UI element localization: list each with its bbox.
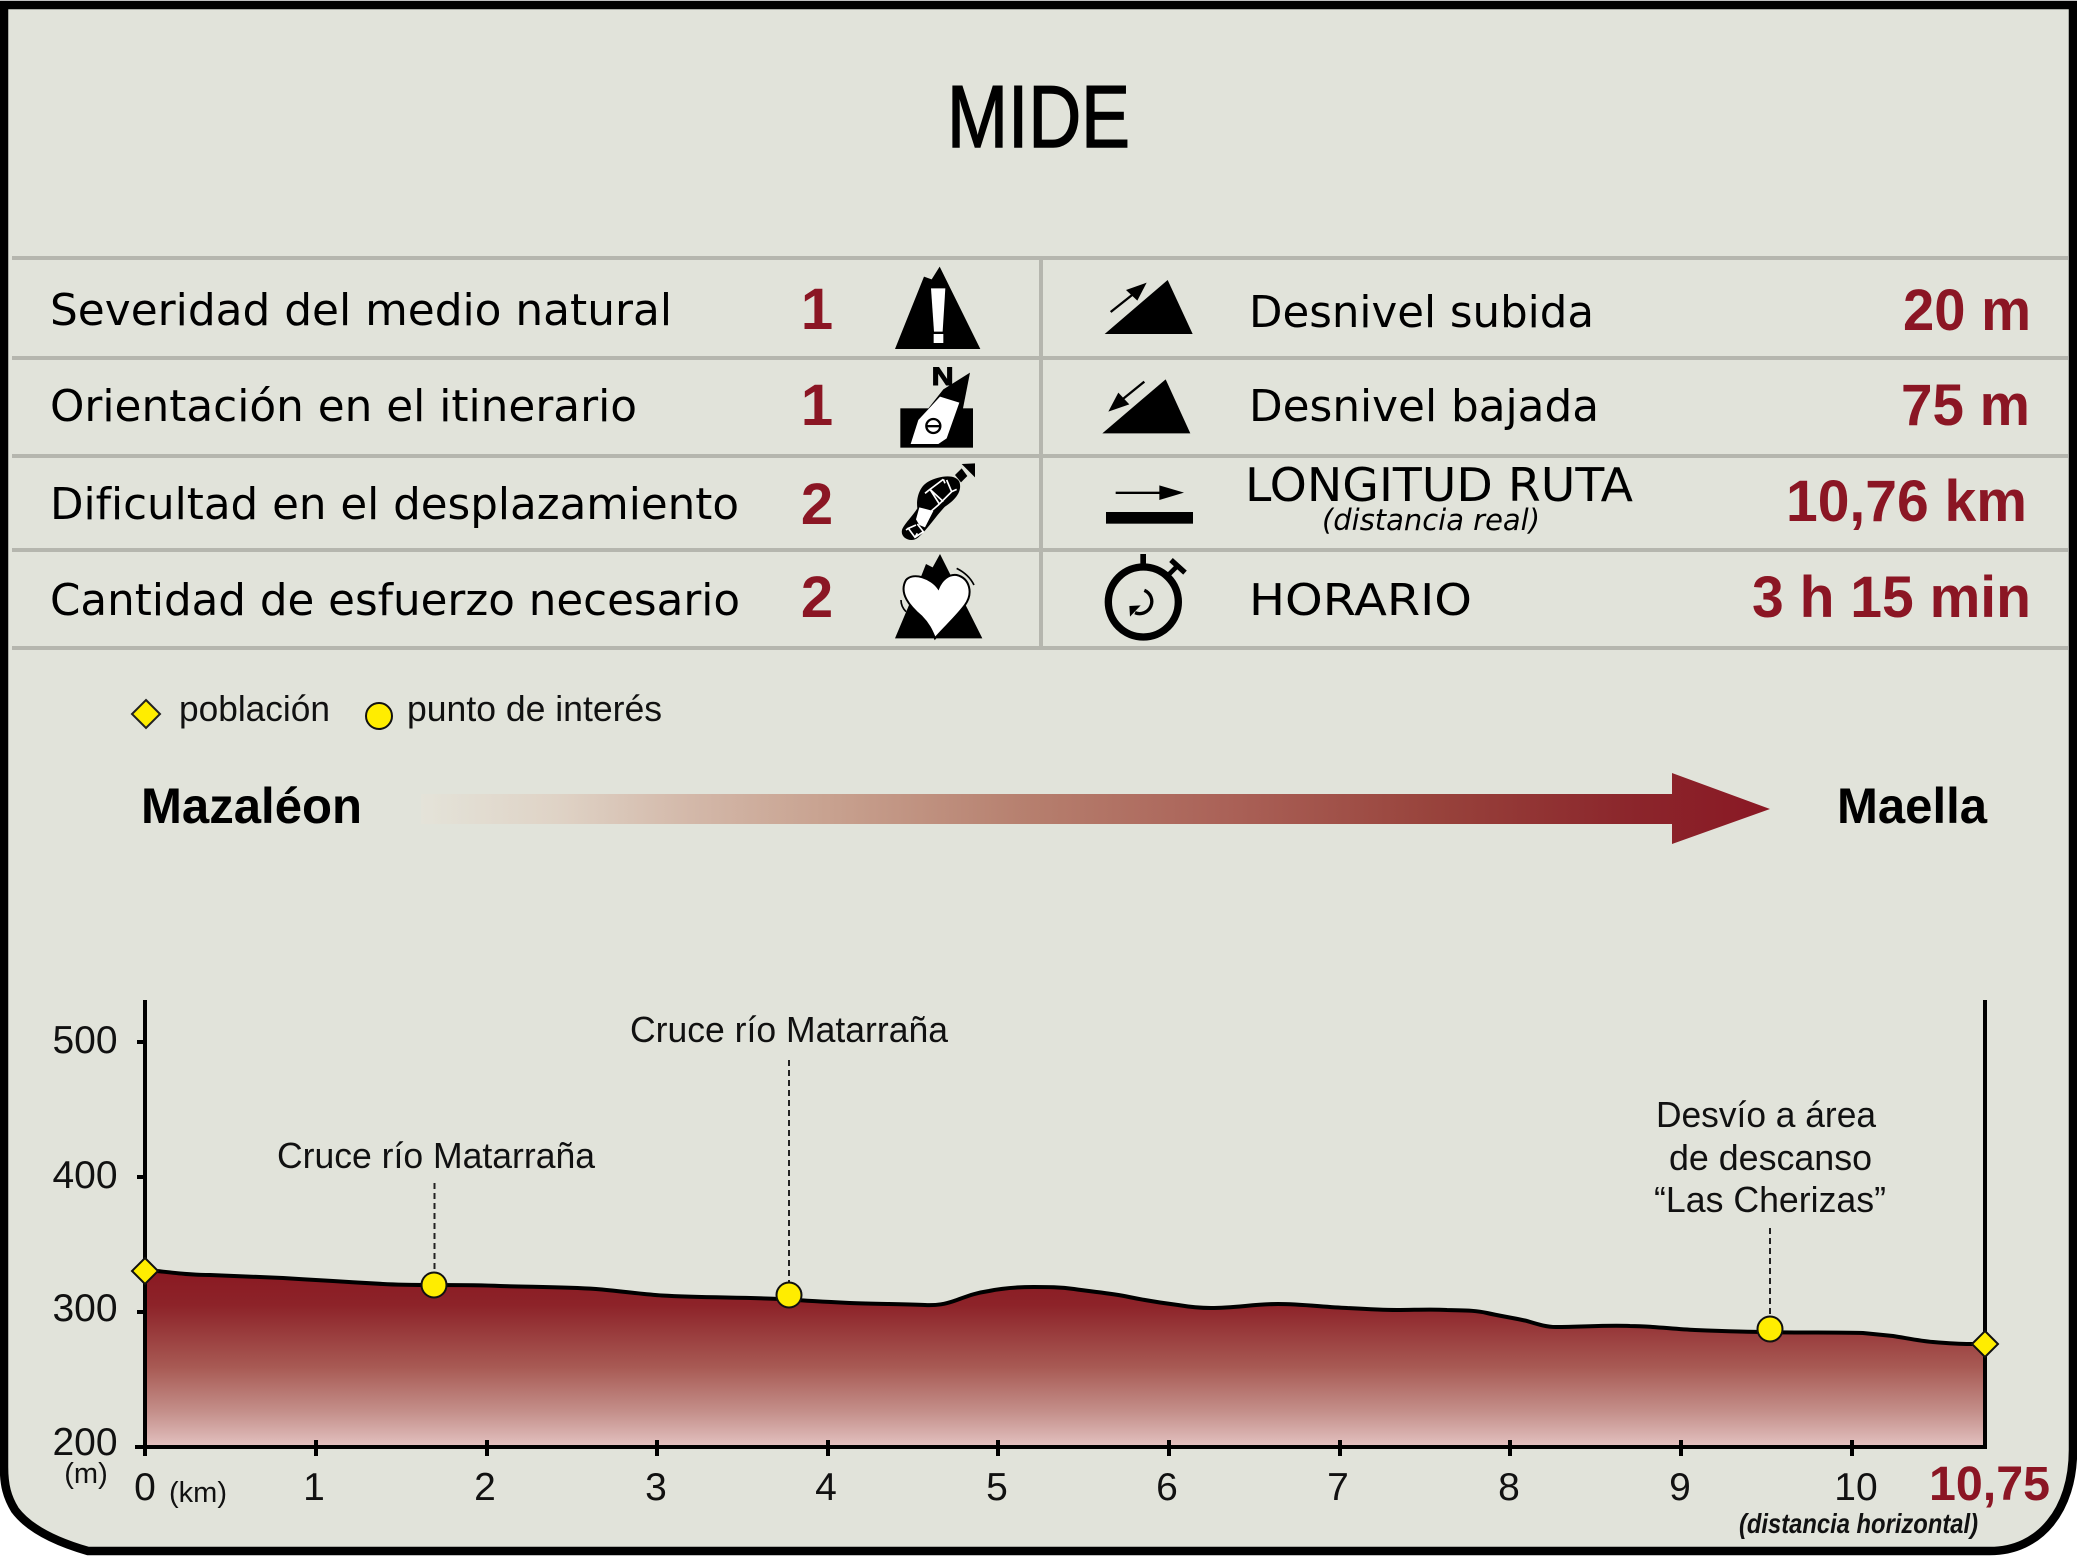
total distance: 10,75 xyxy=(1929,1458,2050,1511)
poi label: Desvío xyxy=(1654,1094,1886,1220)
icon: length xyxy=(1106,485,1193,524)
direction arrow xyxy=(421,773,1770,844)
label: desnivel bajada: Desnivel bajada xyxy=(1249,381,1599,432)
x axis labels: 9 xyxy=(1669,1466,1691,1509)
y axis labels: 300 xyxy=(52,1287,118,1330)
title: MIDE xyxy=(947,67,1130,166)
x axis labels: 7 xyxy=(1327,1466,1349,1509)
x axis labels: (km) xyxy=(169,1477,227,1509)
start label: Mazaléon xyxy=(141,778,362,834)
poi label: Desvío: de descanso xyxy=(1669,1137,1872,1178)
y axis labels xyxy=(52,1019,118,1490)
label: dificultad: Dificultad en el desplazamiento xyxy=(50,479,739,530)
x axis labels: 0 xyxy=(134,1466,156,1509)
y axis labels: (m) xyxy=(64,1458,108,1490)
legend: población: población xyxy=(179,688,330,729)
end label: Maella xyxy=(1837,778,1988,834)
elevation chart xyxy=(52,1000,2050,1539)
profile line xyxy=(145,1268,1985,1344)
label: cantidad: Cantidad de esfuerzo necesario xyxy=(50,575,740,626)
axes xyxy=(135,1000,1987,1456)
x axis labels: 1 xyxy=(303,1466,325,1509)
poi label: Desvío: “Las Cherizas” xyxy=(1654,1179,1886,1220)
poi label: Cruce río Matarraña 1: Cruce río Matarraña xyxy=(277,1135,596,1176)
distance note: (distancia horizontal) xyxy=(1739,1508,1978,1539)
value: horario: 3 h 15 min xyxy=(1752,565,2031,630)
score: severidad: 1 xyxy=(801,277,833,342)
icon: mountain warning xyxy=(895,267,980,349)
x axis labels: 3 xyxy=(645,1466,667,1509)
score: esfuerzo: 2 xyxy=(801,565,833,630)
x axis labels xyxy=(134,1466,1878,1509)
profile area xyxy=(145,1268,1985,1447)
label: orientación: Orientación en el itinerario xyxy=(50,381,637,432)
icon: compass orientation: N xyxy=(932,363,954,391)
x axis labels: 10 xyxy=(1834,1466,1878,1509)
icon: shoe sole xyxy=(902,463,975,540)
poi label: Desvío: Desvío a área xyxy=(1656,1094,1877,1135)
score: dificultad: 2 xyxy=(801,472,833,537)
x axis labels: 5 xyxy=(986,1466,1008,1509)
x axis labels: 6 xyxy=(1156,1466,1178,1509)
value: subida: 20 m xyxy=(1903,278,2031,343)
leader lines xyxy=(434,1060,1770,1316)
value: bajada: 75 m xyxy=(1901,373,2030,438)
icon: descent xyxy=(1102,379,1190,433)
value: longitud: 10,76 km xyxy=(1786,469,2027,534)
icon: stopwatch xyxy=(1108,554,1185,637)
label: longitud ruta: LONGITUD RUTA xyxy=(1245,458,1634,512)
x axis labels: 8 xyxy=(1498,1466,1520,1509)
y axis labels: 400 xyxy=(52,1154,118,1197)
poi label: Cruce río Matarraña 2: Cruce río Matarraña xyxy=(630,1009,949,1050)
icon: heart mountain xyxy=(895,554,982,638)
y axis labels: 200 xyxy=(52,1421,118,1464)
label: severidad: Severidad del medio natural xyxy=(50,285,672,336)
markers xyxy=(132,1258,1998,1357)
legend: población marker xyxy=(132,700,160,728)
x axis labels: 4 xyxy=(815,1466,837,1509)
table grid xyxy=(12,256,2068,650)
label: distancia real: (distancia real) xyxy=(1322,503,1540,537)
label: horario: HORARIO xyxy=(1249,575,1472,626)
legend: punto marker xyxy=(366,703,392,729)
score: orientación: 1 xyxy=(801,373,833,438)
icon: compass orientation xyxy=(900,363,973,448)
legend: punto de interés: punto de interés xyxy=(407,688,662,729)
y axis labels: 500 xyxy=(52,1019,118,1062)
label: desnivel subida: Desnivel subida xyxy=(1249,287,1594,338)
x axis labels: 2 xyxy=(474,1466,496,1509)
icon: ascent xyxy=(1105,280,1193,334)
legend xyxy=(132,688,662,729)
